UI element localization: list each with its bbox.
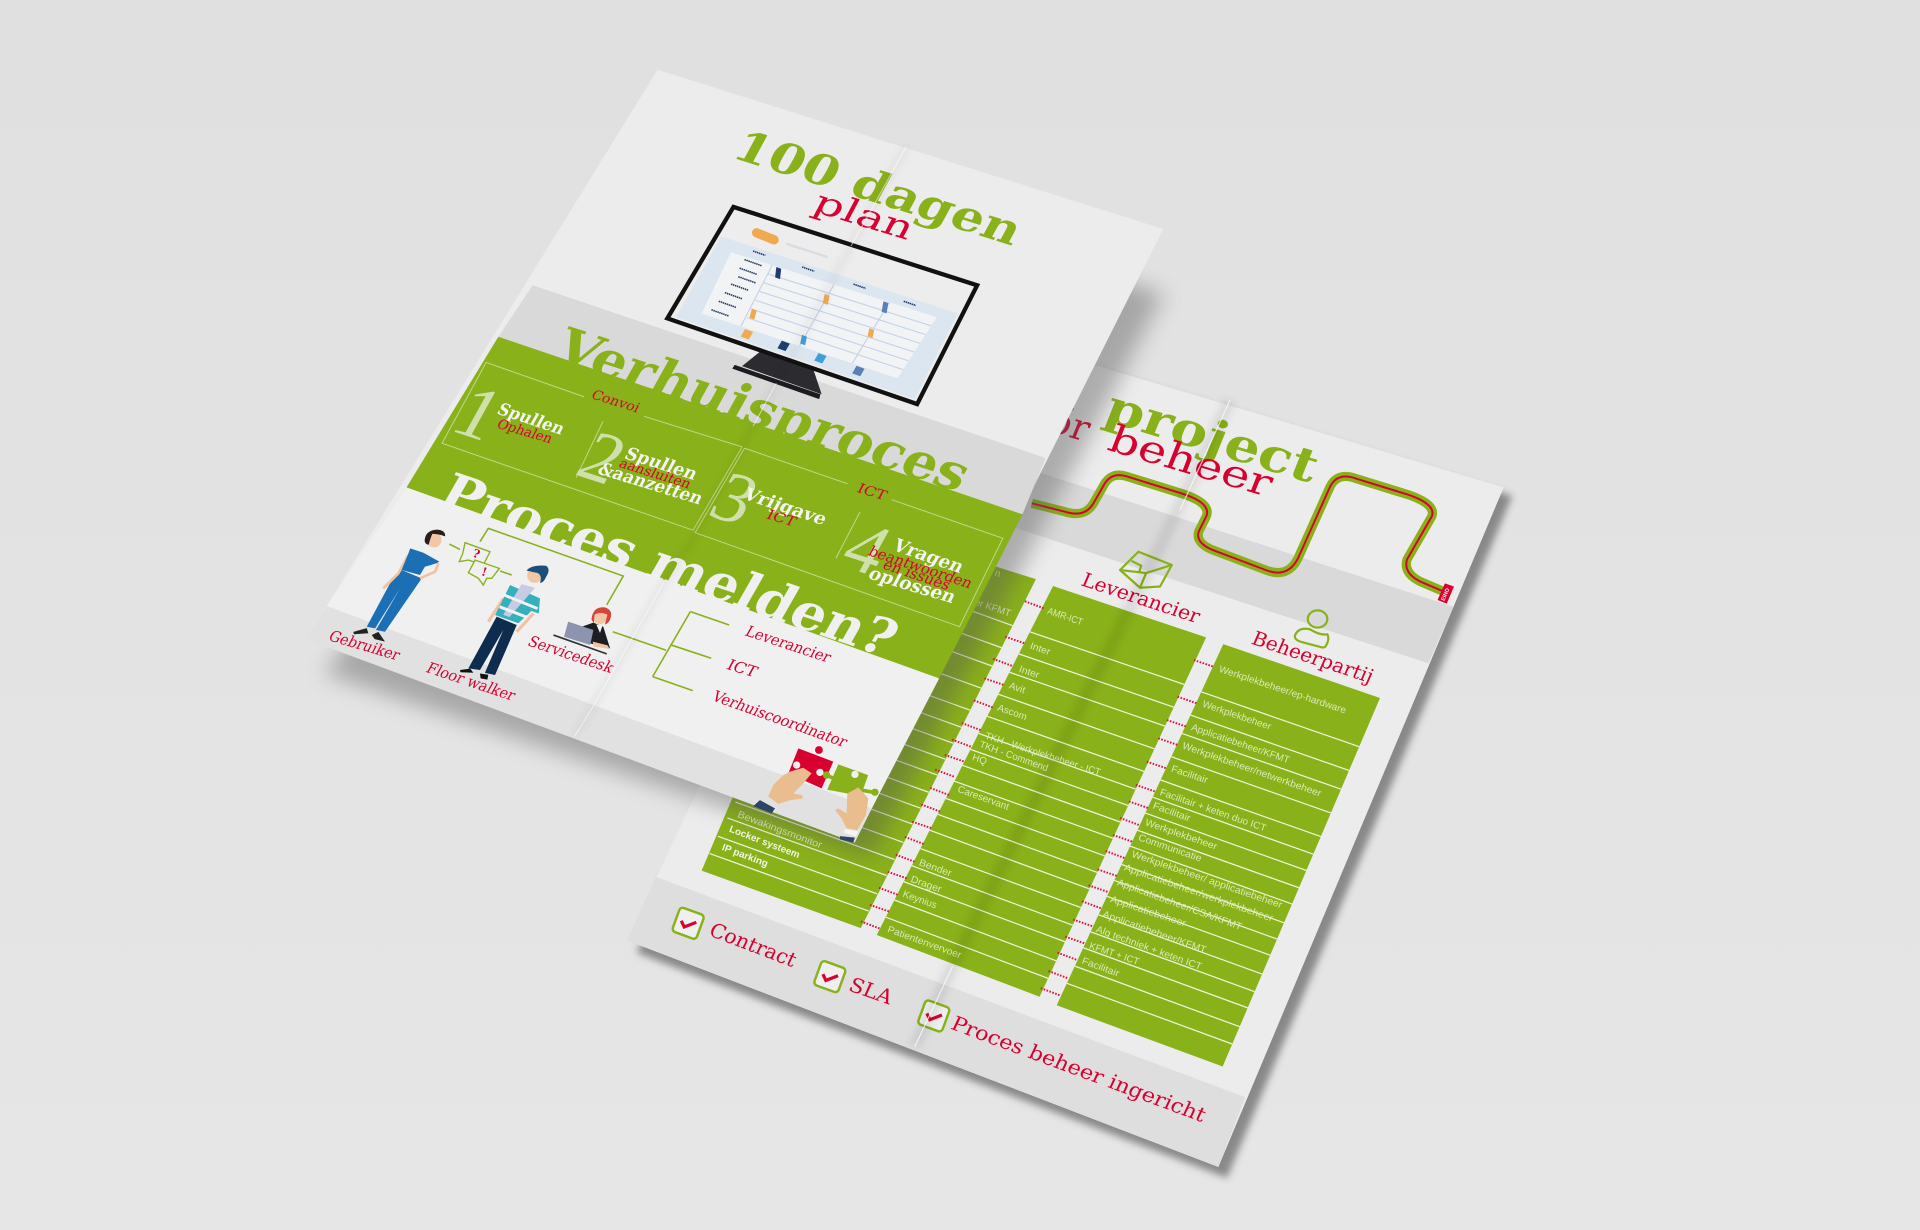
step 4: beantwoorden — [865, 543, 976, 592]
frame: Convoi — [442, 362, 742, 530]
panel: rear poster project voor beheer — [627, 313, 1512, 1178]
heading: project voor beheer: voor — [1001, 386, 1097, 450]
heading: Leverancier: Leverancier — [1078, 568, 1204, 628]
panel: column 3 Beheerpartij table: Werkplekbeheer/netwerkbeheer — [1181, 741, 1323, 800]
panel: column 3 Beheerpartij table: Applicatiebeheer/CSA/KFMT — [1115, 877, 1243, 933]
icon: puzzle and hands — [753, 746, 879, 842]
step 1: Ophalen — [494, 417, 556, 447]
panel: column 2 Leverancier table: Inter — [1028, 641, 1052, 658]
panel: column 2 Leverancier table: Patientenvervoer — [886, 924, 963, 962]
step 2: 2 — [565, 417, 640, 500]
org tree connector — [613, 612, 729, 691]
panel: column 2 Leverancier table: Careservant — [956, 784, 1011, 813]
panel: column 3 Beheerpartij table: Werkplekbeheer/ applicatiebeheer — [1130, 849, 1284, 911]
panel: column 3 Beheerpartij table: Werkplekbeheer/ep-hardware — [1217, 664, 1347, 716]
panel: column 2 Leverancier table: AMR-ICT — [1046, 606, 1084, 628]
panel: column 3 Beheerpartij table: Werkplekbeheer — [1144, 817, 1219, 853]
heading: Proces melden?: Proces melden? — [428, 462, 909, 668]
labels: roles: Leverancier — [742, 623, 835, 666]
dotted connectors between columns — [861, 601, 1213, 996]
labels: roles: Verhuiscoordinator — [708, 687, 851, 751]
heading: project voor beheer: beheer — [1102, 417, 1280, 505]
labels: roles: ICT — [724, 656, 761, 681]
step 4: 4 — [829, 507, 904, 591]
figure: floor walker — [460, 566, 549, 680]
step 2 — [565, 417, 707, 509]
panel: column 3 Beheerpartij table: Facilitair — [1170, 764, 1210, 786]
icon: person — [1295, 610, 1328, 648]
panel: column 3 Beheerpartij table: Facilitair — [1151, 801, 1193, 825]
step 4: en issues — [880, 557, 954, 594]
panel: column 3 Beheerpartij table: Communicatie — [1137, 832, 1203, 864]
heading: project voor beheer: project — [1098, 379, 1328, 493]
shadow of front poster — [324, 153, 1163, 857]
speech bubbles and connectors: ! — [480, 564, 489, 579]
panel: green process band — [407, 337, 1022, 678]
panel: column 2 Leverancier table: TKH - Werkplekbeheer - ICT — [984, 731, 1102, 779]
heading: project voor beheer: Van — [1010, 352, 1090, 421]
heading: Verhuisproces: Verhuisproces — [544, 316, 982, 503]
panel: column 3 Beheerpartij table: KFMT + ICT — [1088, 941, 1140, 968]
front poster fold — [574, 147, 906, 737]
panel: column 2 Leverancier table: Drager — [909, 874, 944, 896]
step 4: Vragen — [888, 535, 968, 578]
label: Proces beheer ingericht: Proces beheer ingericht — [947, 1011, 1210, 1127]
frame: ICT — [695, 448, 1003, 627]
label: ICT: ICT — [854, 481, 890, 504]
step 4: oplossen — [865, 564, 960, 608]
panel: column 3 Beheerpartij table: Facilitair — [1080, 956, 1122, 980]
step 1 — [440, 370, 569, 457]
label: Contract: Contract — [706, 918, 801, 972]
checkbox: proces beheer — [917, 999, 950, 1032]
panel: column 3 Beheerpartij table: Werkplekbeheer — [1201, 699, 1273, 733]
panel: column 3 Beheerpartij table: Applicatiebeheer/KFMT — [1190, 722, 1291, 766]
panel: column 1 table: n — [993, 568, 1002, 580]
panel: column 3 Beheerpartij table: Facilitair + keten duo ICT — [1158, 787, 1268, 834]
step 1: Spullen — [493, 400, 569, 439]
panel: column 2 Leverancier table — [877, 586, 1206, 997]
step 1: 1 — [440, 370, 518, 457]
panel: column 2 Leverancier table: Keynius — [901, 889, 938, 911]
rear poster fold — [915, 400, 1230, 1047]
labels: roles: Floor walker — [423, 659, 519, 704]
panel: column 2 Leverancier table: Ascom — [996, 703, 1028, 723]
panel: column 1 table: IP parking — [720, 842, 769, 870]
speech bubbles and connectors: ? — [471, 546, 482, 562]
figure: nurse user — [353, 530, 445, 642]
panel: column 1 table: Locker systeem — [727, 824, 801, 861]
panel: column 1 table: Bewakingsmonitor — [736, 809, 824, 851]
panel: column 3 Beheerpartij table: Alg techniek + keten ICT — [1094, 924, 1203, 973]
label: SLA: SLA — [845, 973, 897, 1009]
winding route line: EIND — [1441, 588, 1451, 602]
step 2: &aanzetten — [594, 459, 707, 509]
step 3: 3 — [697, 457, 772, 541]
labels: roles: Servicedesk — [525, 633, 618, 677]
checkbox: SLA — [813, 960, 846, 993]
panel: column 1 table: beheer KFMT — [953, 590, 1012, 620]
heading: 100 dagen plan: 100 dagen — [724, 121, 1032, 256]
panel: column 2 Leverancier table: HQ — [971, 752, 989, 768]
panel: column 3 Beheerpartij table: Applicatiebeheer — [1109, 894, 1188, 930]
step 3: Vrijgave — [739, 484, 831, 530]
step 3: ICT — [763, 507, 799, 530]
figure: servicedesk agent — [553, 607, 611, 654]
panel: column 2 Leverancier table: Bender — [917, 857, 954, 880]
heading: 100 dagen plan: plan — [807, 183, 922, 247]
labels: roles: Gebruiker — [326, 627, 404, 664]
step 2: Spullen — [621, 444, 701, 484]
panel: column 2 Leverancier table: Inter — [1017, 664, 1041, 682]
dividers between steps — [576, 421, 860, 558]
heading: project voor beheer — [1001, 352, 1328, 505]
panel: column 3 Beheerpartij table: Applicatiebeheer/KFMT — [1101, 909, 1208, 956]
labels: roles — [326, 623, 851, 751]
icon: box — [1120, 552, 1172, 588]
panel: column 1 table — [702, 520, 1036, 928]
panel: column 3 Beheerpartij table: Applicatiebeheer/werkplekbeheer — [1123, 862, 1275, 925]
panel: column 2 Leverancier table: TKH - Commend — [978, 739, 1050, 774]
panel: column 2 Leverancier table: Avit — [1007, 681, 1027, 696]
step 4 — [829, 507, 976, 608]
step 2: aansluiten — [616, 456, 694, 492]
step 3 — [697, 457, 831, 541]
checkbox: contract — [672, 907, 705, 940]
panel: column 3 Beheerpartij table — [1057, 644, 1380, 1067]
winding route line — [1032, 475, 1454, 604]
panel: front poster 100 dagen plan — [306, 70, 1163, 842]
speech bubbles and connectors — [449, 528, 623, 605]
label: Convoi: Convoi — [588, 387, 643, 416]
heading: Beheerpartij: Beheerpartij — [1248, 627, 1377, 688]
icon: monitor with planning — [667, 207, 977, 404]
